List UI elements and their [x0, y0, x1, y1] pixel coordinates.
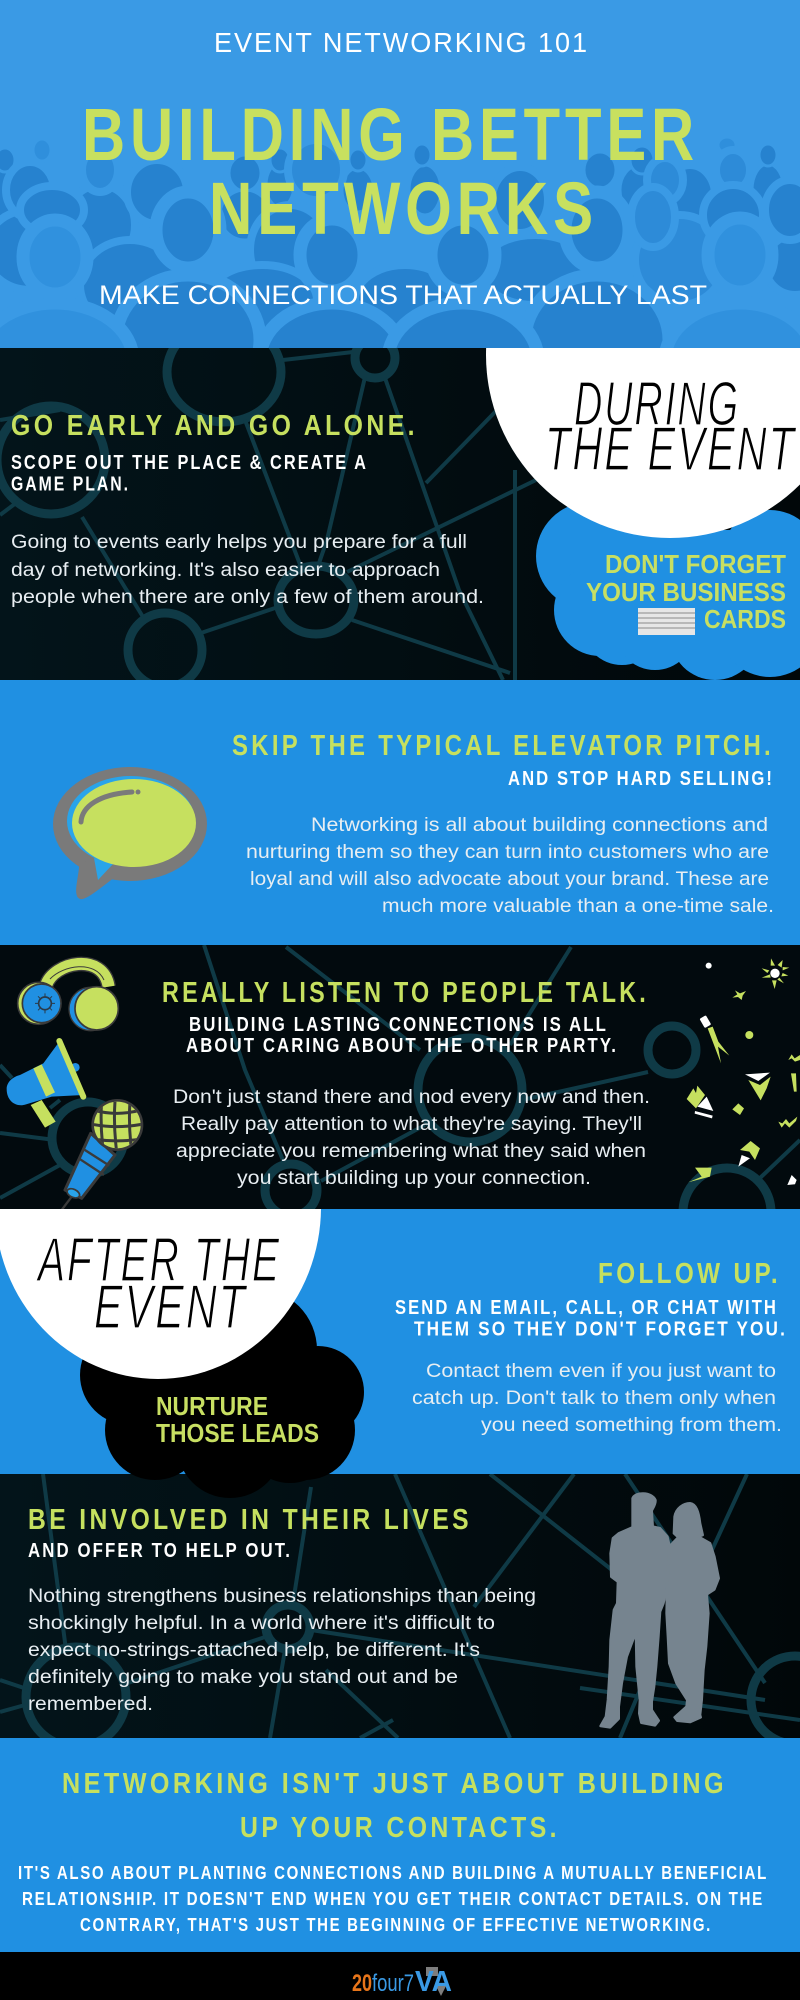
body text: remembered. — [28, 1694, 153, 1715]
body text: catch up. Don't talk to them only when — [412, 1388, 776, 1409]
panel: go early — [0, 348, 800, 680]
title: NETWORKS — [209, 167, 598, 250]
illustration: couple silhouette — [601, 1494, 719, 1727]
body text: Don't just stand there and nod every now and then. — [173, 1087, 650, 1108]
subheading: GAME PLAN. — [11, 474, 130, 496]
callout cloud: business cards: YOUR BUSINESS — [586, 577, 786, 607]
callout cloud: business cards: DON'T FORGET — [605, 549, 786, 579]
body text: loyal and will also advocate about your brand. These are — [250, 869, 769, 890]
network pattern — [0, 945, 800, 1209]
panel: conclusion — [0, 1738, 800, 1952]
badge: after the event: AFTER THE — [35, 1226, 281, 1295]
badge: after the event — [0, 1209, 321, 1379]
title — [82, 93, 699, 250]
icon: business cards — [638, 608, 695, 635]
eyebrow: EVENT NETWORKING 101 — [214, 27, 589, 58]
subtitle: MAKE CONNECTIONS THAT ACTUALLY LAST — [99, 280, 707, 310]
logo — [352, 1966, 452, 1998]
body text — [28, 1586, 536, 1715]
subheading — [12, 455, 366, 490]
body text: definitely going to make you stand out and be — [28, 1667, 458, 1688]
callout cloud: nurture those leads: NURTURE — [156, 1391, 268, 1421]
panel: elevator pitch — [0, 680, 800, 945]
body text: you start building up your connection. — [237, 1168, 591, 1189]
body text: nurturing them so they can turn into customers who are — [246, 842, 769, 863]
body text: Nothing strengthens business relationships than being — [28, 1586, 536, 1607]
heading — [62, 1768, 727, 1844]
icon: megaphone — [7, 1041, 83, 1128]
subheading: ABOUT CARING ABOUT THE OTHER PARTY. — [186, 1035, 618, 1057]
logo: 20 — [352, 1970, 372, 1997]
decorative confetti shapes — [687, 958, 800, 1185]
callout cloud: business cards — [536, 502, 800, 680]
subheading: BUILDING LASTING CONNECTIONS IS ALL — [189, 1014, 608, 1036]
body text: people when there are only a few of them around. — [11, 587, 484, 608]
body text: Contact them even if you just want to — [426, 1361, 776, 1382]
body text — [246, 815, 774, 917]
body text: much more valuable than a one-time sale. — [382, 896, 774, 917]
subheading — [186, 1017, 615, 1052]
icon: headphones — [18, 964, 118, 1031]
heading: REALLY LISTEN TO PEOPLE TALK. — [162, 977, 649, 1009]
body text: expect no-strings-attached help, be different. It's — [28, 1640, 480, 1661]
body text: you need something from them. — [481, 1415, 782, 1436]
heading: BE INVOLVED IN THEIR LIVES — [28, 1504, 472, 1536]
panel: header — [0, 0, 800, 348]
body text: Really pay attention to what they're saying. They'll — [181, 1114, 642, 1135]
body text: day of networking. It's also easier to approach — [11, 560, 440, 581]
icon: microphone — [62, 1099, 147, 1210]
heading: UP YOUR CONTACTS. — [240, 1812, 560, 1844]
badge: during the event — [486, 348, 800, 538]
body text: appreciate you remembering what they said when — [176, 1141, 646, 1162]
subheading: AND OFFER TO HELP OUT. — [28, 1540, 292, 1562]
body text — [173, 1087, 650, 1189]
network pattern — [0, 1474, 800, 1747]
body text: shockingly helpful. In a world where it's difficult to — [28, 1613, 495, 1634]
panel: be involved — [0, 1474, 800, 1747]
network pattern — [0, 322, 536, 687]
subheading: SCOPE OUT THE PLACE & CREATE A — [11, 452, 368, 474]
logo: four7 — [372, 1970, 414, 1997]
body text — [11, 532, 484, 608]
callout cloud: nurture those leads: THOSE LEADS — [156, 1418, 319, 1448]
body text: Going to events early helps you prepare for a full — [11, 532, 467, 553]
panel: really listen — [0, 945, 800, 1209]
callout cloud: nurture those leads — [80, 1288, 364, 1498]
panel: follow up — [0, 1209, 800, 1474]
closing text — [18, 1863, 768, 1935]
body text: Networking is all about building connections and — [311, 815, 768, 836]
icon: speech bubble — [53, 767, 207, 899]
body text — [412, 1361, 782, 1436]
logo: VA — [415, 1966, 452, 1998]
subheading — [395, 1297, 787, 1340]
crowd silhouette background — [0, 138, 800, 348]
heading: GO EARLY AND GO ALONE. — [11, 410, 418, 442]
callout cloud: business cards: CARDS — [704, 604, 786, 634]
footer — [0, 1952, 800, 2000]
badge: after the event: EVENT — [94, 1273, 248, 1342]
